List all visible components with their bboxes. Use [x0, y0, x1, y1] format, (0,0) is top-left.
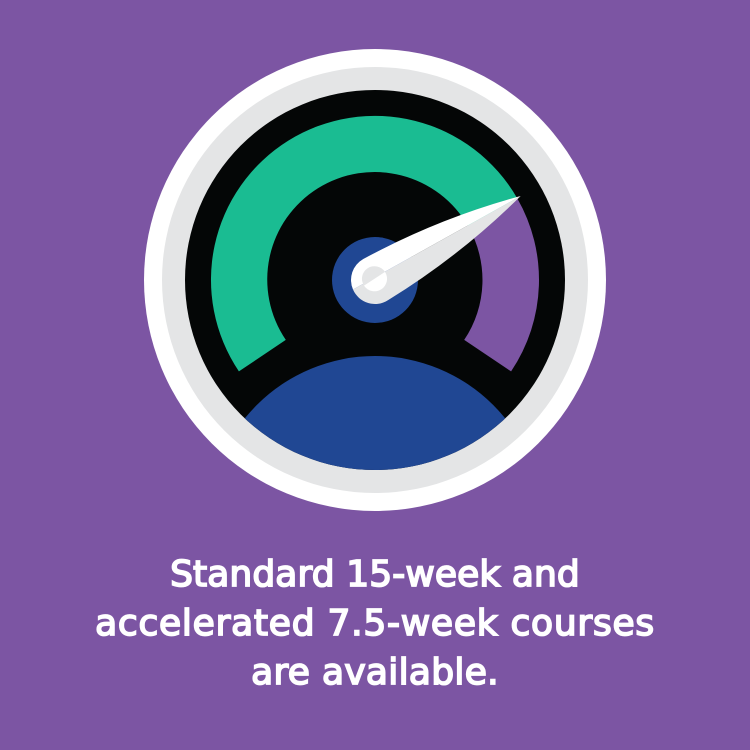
gauge black face	[185, 90, 565, 470]
caption text: are available.	[251, 652, 499, 693]
needle grey lower half	[353, 196, 521, 304]
needle white upper half	[351, 196, 521, 290]
needle	[351, 196, 521, 304]
blue shoulders of person	[245, 356, 505, 470]
green arc segment	[211, 116, 517, 371]
needle pivot grey half	[362, 266, 385, 286]
gauge outer white ring	[144, 49, 606, 511]
speedometer gauge icon	[144, 49, 606, 511]
needle pivot white half	[364, 272, 387, 291]
gauge grey ring	[162, 67, 588, 493]
blue head hub	[332, 237, 418, 323]
purple arc segment	[464, 198, 539, 371]
caption text: Standard 15-week and	[170, 554, 580, 595]
caption text: accelerated 7.5-week courses	[95, 603, 655, 644]
caption text	[95, 554, 655, 693]
